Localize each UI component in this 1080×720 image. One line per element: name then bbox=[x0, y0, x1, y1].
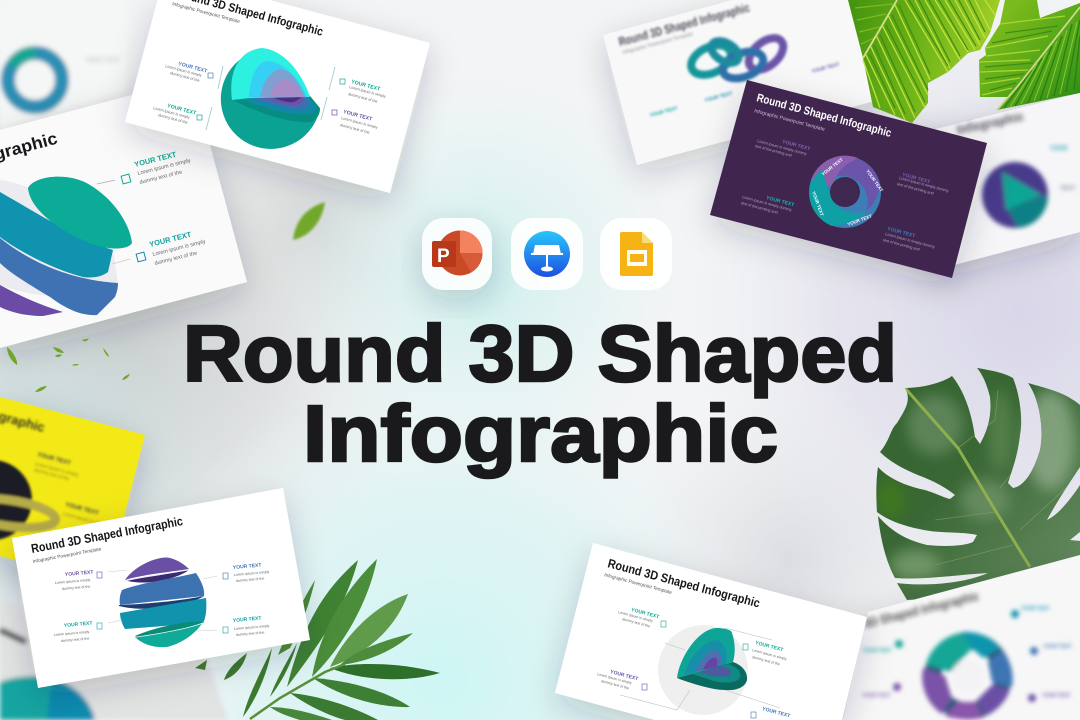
callouts: dummy text of the bbox=[340, 123, 370, 135]
callouts: YOUR TEXT bbox=[65, 570, 94, 578]
donut chart: YOUR TEXT bbox=[865, 169, 884, 193]
blurred slide: right sphere: Infographic bbox=[956, 109, 1025, 137]
callouts: dummy text of the bbox=[170, 71, 200, 83]
callout labels: Lorem ipsum is simply dummy bbox=[885, 232, 935, 249]
callouts: YOUR TEXT bbox=[177, 61, 209, 75]
callouts: YOUR TEXT bbox=[64, 621, 93, 629]
callouts bbox=[54, 563, 270, 643]
main title: Round 3D Shaped bbox=[183, 309, 897, 398]
callout: lower: YOUR TEXT bbox=[148, 230, 193, 249]
blurred slide: wheel: YOUR TEXT bbox=[862, 693, 891, 699]
callouts: dummy text of the bbox=[348, 92, 378, 104]
callout labels: YOUR TEXT bbox=[765, 195, 795, 208]
callouts: dummy text of the bbox=[61, 637, 90, 643]
callouts bbox=[153, 61, 386, 135]
slide title: Round 3D Shaped Infographic bbox=[606, 556, 762, 611]
slide: heart layered shape bbox=[555, 543, 867, 720]
scattered small leaves bbox=[7, 338, 130, 392]
blurred slide: chain links: Infographic Powerpoint Template bbox=[622, 31, 694, 56]
blurred slide: right sphere: TEXT bbox=[1060, 186, 1076, 192]
icon: chain of rings bbox=[686, 32, 789, 83]
callout labels: text of the printing and bbox=[741, 201, 778, 215]
blurred yellow slide: YOUR TEXT bbox=[36, 452, 72, 467]
donut chart: YOUR TEXT bbox=[821, 157, 844, 177]
icon card: PowerPoint: P bbox=[437, 246, 450, 267]
callouts: YOUR TEXT bbox=[233, 563, 262, 571]
callout labels: YOUR TEXT bbox=[781, 139, 811, 152]
donut chart: YOUR TEXT bbox=[847, 213, 873, 227]
slide: sliced sphere bbox=[12, 488, 310, 688]
main title bbox=[183, 309, 897, 478]
icon card: Keynote bbox=[511, 218, 583, 290]
callout: upper: YOUR TEXT bbox=[133, 150, 178, 169]
callouts: YOUR TEXT bbox=[233, 616, 262, 624]
callouts: Lorem ipsum is simply bbox=[752, 648, 787, 661]
blurred slide: chain links: YOUR TEXT bbox=[704, 91, 733, 104]
callout: upper bbox=[97, 150, 192, 186]
callout labels: YOUR TEXT bbox=[901, 172, 931, 185]
blurred slide: wheel bbox=[843, 555, 1080, 720]
blurred slide: wheel: 3D Shaped Infographic bbox=[862, 589, 981, 631]
callout labels: YOUR TEXT bbox=[886, 226, 916, 239]
icon: blurred green leaf bbox=[293, 202, 325, 240]
callouts: Lorem ipsum is simply bbox=[153, 106, 190, 120]
blurred slide: chain links bbox=[603, 0, 878, 165]
slide: layered dome bbox=[125, 0, 430, 193]
callouts: Lorem ipsum is simply bbox=[234, 624, 270, 631]
blurred slide: right sphere bbox=[900, 93, 1080, 270]
monstera leaf bbox=[876, 368, 1080, 600]
slide: purple donut bbox=[710, 80, 987, 278]
callouts: YOUR TEXT bbox=[754, 640, 784, 653]
palm branch: bottom centre bbox=[195, 559, 440, 720]
callout labels bbox=[741, 139, 949, 252]
blurred yellow slide: YOUR TEXT bbox=[64, 502, 100, 517]
callouts: Lorem ipsum is simply bbox=[349, 85, 386, 99]
layered dome chart bbox=[221, 48, 320, 149]
callout labels: Lorem ipsum is simply dummy bbox=[757, 139, 807, 156]
palm frond: top right bbox=[848, 0, 1080, 123]
slide: heart layered shape: Infographic Powerpoint Template bbox=[603, 572, 673, 596]
callouts: YOUR TEXT bbox=[609, 669, 639, 682]
heart chart bbox=[620, 625, 780, 715]
blurred slide: right sphere: YOUR bbox=[1050, 146, 1068, 152]
callouts: Lorem ipsum is simply bbox=[55, 578, 91, 585]
blurred slide: chain links: YOUR TEXT bbox=[811, 62, 840, 75]
callouts: Lorem ipsum is simply bbox=[618, 610, 653, 623]
icon card: PowerPoint bbox=[422, 218, 492, 290]
callouts: Lorem ipsum is simply bbox=[341, 116, 378, 130]
callout labels: Lorem ipsum is simply dummy bbox=[899, 176, 949, 193]
callouts: dummy text of the bbox=[236, 577, 265, 583]
main title: Infographic bbox=[303, 389, 778, 478]
callouts: dummy text of the bbox=[236, 631, 265, 637]
callouts: dummy text of the bbox=[62, 585, 91, 591]
palm frond: right corner bbox=[979, 0, 1080, 110]
slide: layered dome: Infographic Powerpoint Template bbox=[171, 1, 241, 25]
callouts: dummy text of the bbox=[622, 617, 650, 628]
blurred slide: top left ring: YOUR TEXT bbox=[85, 58, 120, 64]
slide: sliced sphere: Infographic Powerpoint Template bbox=[32, 546, 102, 565]
callouts: YOUR TEXT bbox=[630, 607, 660, 620]
slide: purple donut: Infographic Powerpoint Template bbox=[753, 108, 825, 133]
callouts: dummy text of the bbox=[158, 113, 188, 125]
callout labels: text of the printing and bbox=[897, 182, 934, 196]
callout labels: text of the printing and bbox=[755, 144, 792, 158]
slide: large striped sphere bbox=[0, 79, 247, 348]
sliced sphere chart bbox=[119, 557, 206, 647]
blurred slide: wheel: YOUR TEXT bbox=[1021, 606, 1050, 612]
blurred yellow slide: Lorem ipsum is simply bbox=[35, 461, 80, 478]
callout: lower: dummy text of the bbox=[154, 251, 198, 267]
blurred slide: chain links: YOUR TEXT bbox=[649, 106, 678, 119]
callouts: dummy text of the bbox=[752, 655, 780, 666]
callouts: YOUR TEXT bbox=[761, 706, 791, 719]
blurred yellow slide: dummy text of the bbox=[34, 467, 70, 481]
slide title: Round 3D Shaped Infographic bbox=[30, 514, 184, 556]
callout: lower: Lorem ipsum is simply bbox=[152, 239, 207, 258]
callout labels: text of the printing and bbox=[883, 238, 920, 252]
callout labels: Lorem ipsum is simply dummy bbox=[742, 195, 792, 212]
donut chart bbox=[809, 156, 884, 228]
blurred slide: wheel: YOUR TEXT bbox=[1043, 644, 1072, 650]
callouts bbox=[597, 607, 791, 719]
callout: upper: Lorem ipsum is simply bbox=[137, 158, 192, 177]
blurred slide: top left ring bbox=[0, 0, 130, 128]
striped sphere bbox=[0, 177, 132, 316]
blurred yellow slide bbox=[0, 397, 145, 570]
callouts: Lorem ipsum is simply bbox=[54, 630, 90, 637]
blurred slide: bottom left pie bbox=[0, 600, 228, 720]
icon card: Google Slides bbox=[600, 218, 672, 290]
blurred slide: wheel: YOUR TEXT bbox=[863, 648, 892, 654]
callouts: Lorem ipsum is simply bbox=[234, 570, 270, 577]
callouts: YOUR TEXT bbox=[166, 103, 198, 117]
blurred slide: wheel: YOUR TEXT bbox=[1042, 693, 1071, 699]
slide title: Round 3D Shaped Infographic bbox=[755, 92, 893, 140]
callouts: dummy text of the bbox=[601, 679, 629, 690]
blurred yellow slide: Lorem ipsum is simply bbox=[63, 511, 108, 528]
callouts: YOUR TEXT bbox=[350, 79, 382, 93]
callouts: Lorem ipsum is simply bbox=[597, 672, 632, 685]
donut chart: YOUR TEXT bbox=[811, 191, 825, 217]
callouts: Lorem ipsum is simply bbox=[165, 64, 202, 78]
callouts: YOUR TEXT bbox=[342, 109, 374, 123]
callout: lower bbox=[112, 230, 207, 267]
callout: upper: dummy text of the bbox=[139, 170, 183, 186]
